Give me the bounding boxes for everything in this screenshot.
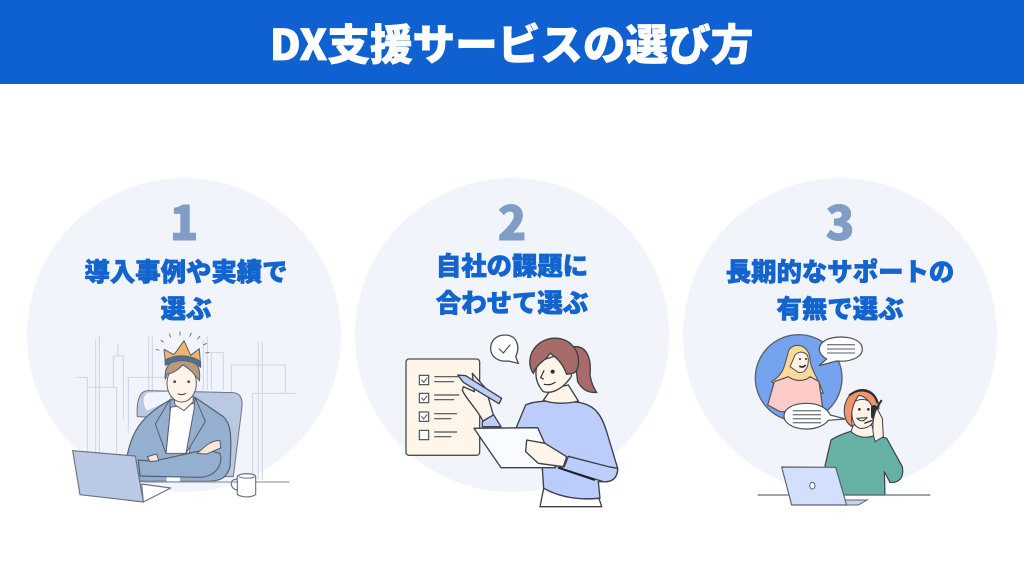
- heading 2: 自社の課題に: [436, 247, 588, 283]
- crown sparkle lines: [156, 332, 209, 353]
- tablet: [474, 428, 556, 468]
- heading 3: 有無で選ぶ: [777, 290, 904, 326]
- face details: [551, 370, 555, 374]
- panel: step 2: [355, 178, 669, 507]
- ponytail: [573, 347, 597, 392]
- illustration: woman with checklist: [406, 335, 618, 507]
- circle background 1: [27, 178, 341, 492]
- checklist rows: [419, 375, 429, 440]
- lower speech bubble: [784, 403, 845, 429]
- operator hair: [844, 389, 879, 427]
- hair: [165, 359, 200, 381]
- sweater: [517, 401, 618, 499]
- torso and jacket: [127, 397, 231, 481]
- headset: [849, 391, 878, 403]
- heading 1: 導入事例や実績で: [84, 253, 288, 289]
- mug: [237, 474, 256, 497]
- number 1: 1: [170, 185, 198, 254]
- neck and face: [173, 390, 193, 411]
- video call circle: [755, 335, 842, 421]
- lapels: [155, 397, 205, 453]
- raised arm and hand: [482, 414, 501, 427]
- heading 2: 合わせて選ぶ: [436, 284, 589, 320]
- circle background 2: [355, 178, 669, 492]
- pen: [458, 375, 502, 404]
- desk line: [758, 493, 930, 497]
- heading 3: 長期的なサポートの: [726, 253, 954, 289]
- circle background 3: [683, 178, 997, 492]
- skirt: [540, 488, 602, 507]
- crossed arms: [138, 450, 221, 477]
- neck and face: [543, 385, 578, 403]
- hand: [197, 441, 221, 454]
- lower hand and sleeve: [526, 440, 567, 467]
- customer hair: [772, 345, 823, 393]
- desk line: [143, 480, 289, 484]
- crown: [164, 341, 201, 367]
- upper speech bubble: [819, 337, 862, 366]
- checklist board: [406, 359, 480, 455]
- illustration: support operator: [755, 335, 930, 505]
- panel: step 3: [683, 178, 997, 505]
- face details: [858, 408, 861, 411]
- shirt: [166, 403, 195, 453]
- hair: [530, 338, 578, 374]
- header band: [0, 0, 1024, 84]
- operator neck and face: [851, 425, 875, 437]
- operator sweater: [825, 431, 903, 495]
- customer face: [790, 352, 808, 373]
- speech bubble check: [491, 335, 518, 363]
- number 3: 3: [826, 185, 854, 254]
- chair: [137, 391, 242, 477]
- customer sweater: [768, 377, 822, 412]
- panel: step 1: [27, 178, 341, 502]
- eyes and smile: [173, 380, 176, 383]
- illustration: businessman with crown: [73, 332, 296, 502]
- heading 1: 選ぶ: [161, 290, 212, 326]
- laptop: [73, 451, 143, 502]
- title: DX支援サービスの選び方: [270, 12, 753, 73]
- hand to ear: [873, 408, 883, 442]
- laptop: [782, 467, 847, 505]
- number 2: 2: [498, 185, 526, 254]
- city skyline: [77, 336, 296, 480]
